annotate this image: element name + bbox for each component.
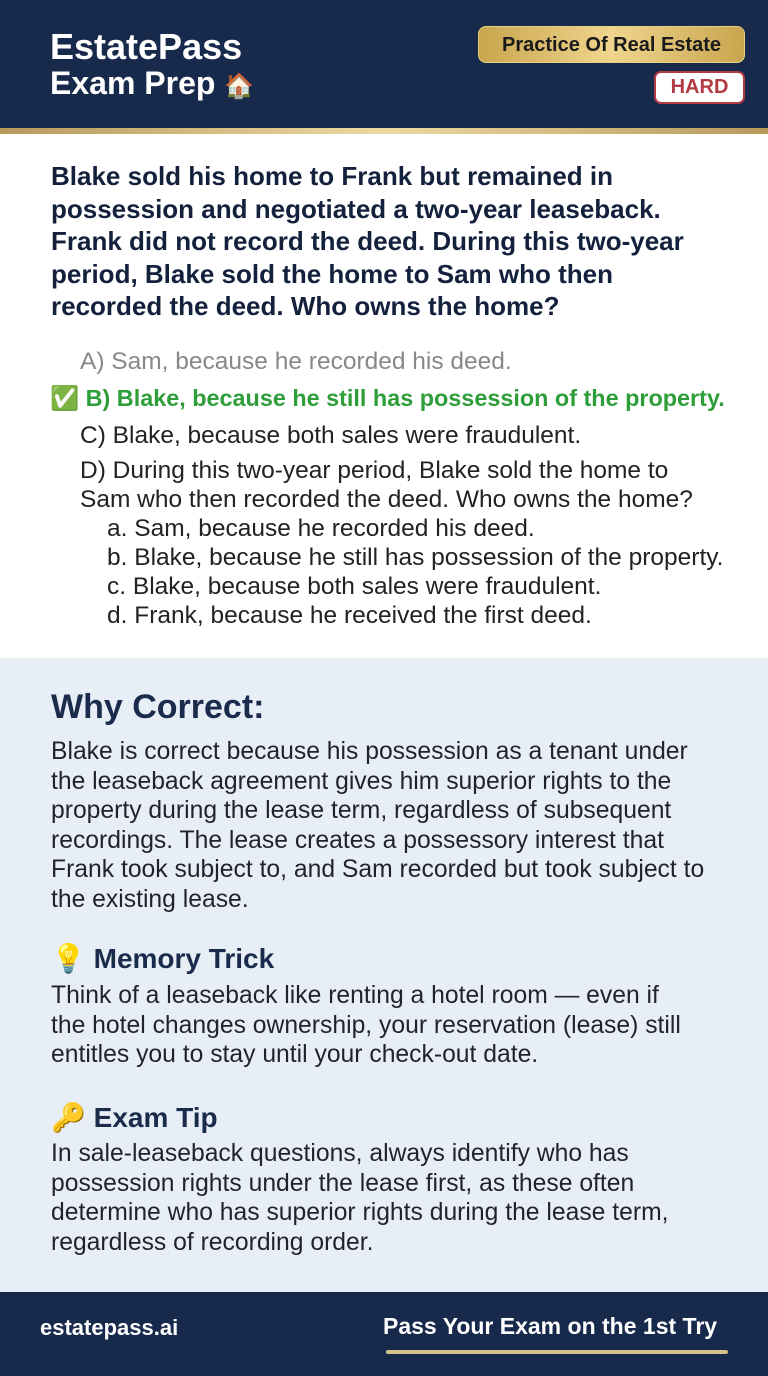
text: why correct: Frank took subject to, and Sam recorded but took subject to (51, 856, 704, 883)
explanation panel (0, 658, 768, 1292)
footer (0, 1292, 768, 1376)
text: exam tip: regardless of recording order. (51, 1228, 373, 1256)
text: exam tip (51, 1140, 669, 1256)
badge: difficulty (654, 71, 745, 104)
logo title: Exam Prep 🏠 (50, 65, 254, 101)
answer options: ✅ B) Blake, because he still has possession of the property. (50, 385, 725, 411)
answer options: c. Blake, because both sales were fraudulent. (107, 573, 601, 600)
question: possession and negotiated a two-year leaseback. (51, 194, 661, 224)
header (0, 0, 768, 134)
badge: difficulty: HARD (671, 76, 728, 98)
text: why correct: recordings. The lease creates a possessory interest that (51, 826, 664, 854)
footer tagline: Pass Your Exam on the 1st Try (383, 1313, 717, 1339)
answer options: Sam who then recorded the deed. Who owns the home? (80, 486, 693, 513)
answer options (50, 348, 725, 629)
answer options: b. Blake, because he still has possession of the property. (107, 544, 723, 571)
logo title: EstatePass (50, 26, 242, 67)
heading: exam tip: 🔑 Exam Tip (51, 1102, 218, 1133)
logo title (50, 26, 254, 101)
question: period, Blake sold the home to Sam who then (51, 258, 613, 288)
answer options: A) Sam, because he recorded his deed. (80, 348, 512, 375)
answer options: C) Blake, because both sales were fraudulent. (80, 422, 581, 449)
text: why correct (51, 738, 704, 912)
answer options: a. Sam, because he recorded his deed. (107, 515, 535, 542)
heading: why correct: Why Correct: (51, 688, 264, 726)
text: memory trick: Think of a leaseback like renting a hotel room — even if (51, 982, 659, 1009)
text: why correct: property during the lease term, regardless of subsequent (51, 797, 671, 824)
badge: category (478, 26, 745, 63)
answer options: d. Frank, because he received the first deed. (107, 602, 592, 629)
text: memory trick: the hotel changes ownership, your reservation (lease) still (51, 1012, 681, 1038)
text: why correct: the leaseback agreement gives him superior rights to the (51, 768, 671, 794)
text: exam tip: possession rights under the lease first, as these often (51, 1170, 634, 1196)
text: exam tip: In sale-leaseback questions, always identify who has (51, 1140, 629, 1167)
question (51, 161, 684, 321)
text: why correct: Blake is correct because his possession as a tenant under (51, 738, 688, 765)
answer options: D) During this two-year period, Blake sold the home to (80, 457, 668, 484)
text: memory trick (51, 982, 681, 1068)
question: recorded the deed. Who owns the home? (51, 291, 560, 321)
heading: memory trick: 💡 Memory Trick (51, 943, 274, 974)
question: Frank did not record the deed. During this two-year (51, 226, 684, 256)
badge: category: Practice Of Real Estate (502, 34, 721, 56)
question: Blake sold his home to Frank but remained in (51, 161, 613, 191)
footer url: estatepass.ai (40, 1315, 178, 1340)
text: exam tip: determine who has superior rights during the lease term, (51, 1199, 669, 1226)
text: why correct: the existing lease. (51, 886, 249, 912)
text: memory trick: entitles you to stay until your check-out date. (51, 1041, 538, 1068)
